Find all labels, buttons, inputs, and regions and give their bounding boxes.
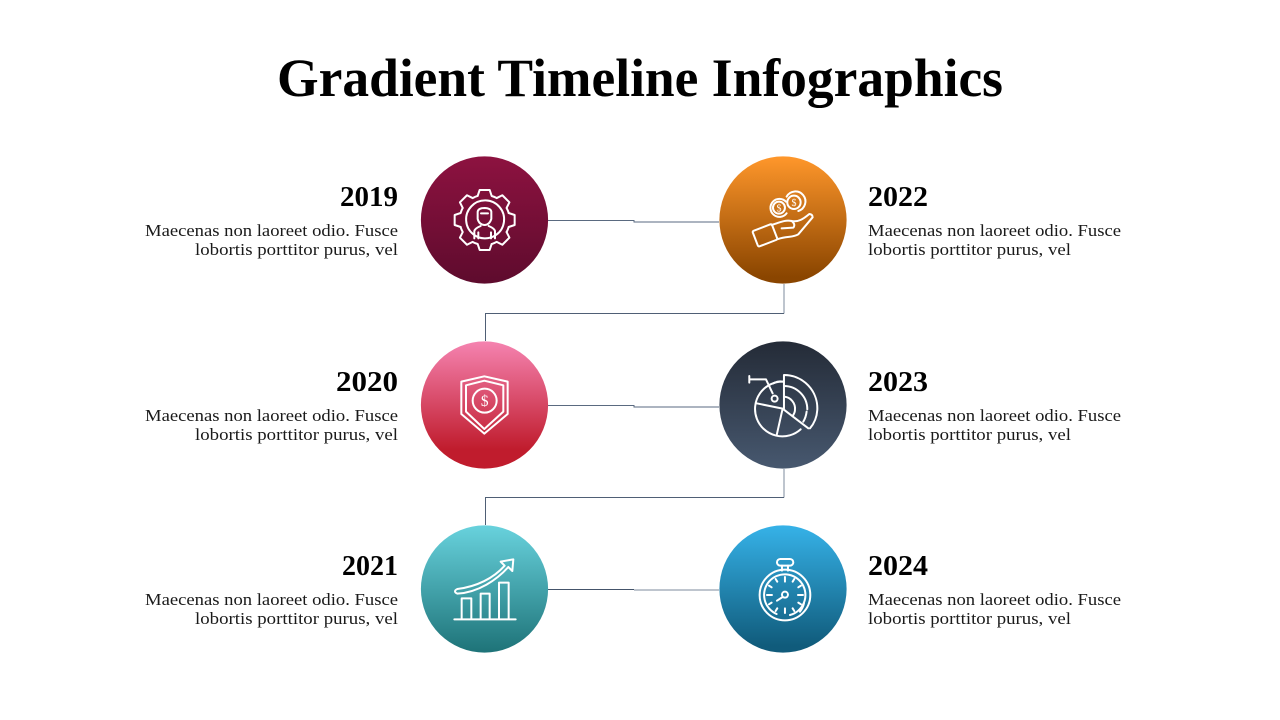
icon: hand with coins: $ [776,203,781,214]
circle 2023 [719,341,847,469]
icon: rising bar chart [454,559,516,619]
panel: 2019 [145,156,548,284]
panel: 2022 [719,156,1121,284]
description 2019: Maecenas non laoreet odio. Fusce [145,221,398,240]
year 2022: 2022 [868,181,928,213]
circle 2021 [421,525,548,653]
icon: shield with dollar: $ [481,393,489,410]
panel: 2024 [719,525,1121,653]
title: Gradient Timeline Infographics [277,48,1003,108]
icon: gear with person [455,190,515,250]
circle 2020 [421,341,548,469]
description 2021: lobortis porttitor purus, vel [195,609,398,628]
year 2020: 2020 [336,366,398,398]
icon: radar pie chart [749,375,817,436]
description 2024: lobortis porttitor purus, vel [868,609,1071,628]
description 2019 [145,221,398,259]
circle 2019 [421,156,548,284]
panel: 2023 [719,341,1121,469]
description 2022: lobortis porttitor purus, vel [868,240,1071,259]
year 2024: 2024 [868,550,928,582]
description 2024 [868,590,1121,628]
year 2021: 2021 [342,550,398,582]
description 2020 [145,406,398,444]
description 2023: Maecenas non laoreet odio. Fusce [868,406,1121,425]
circle 2024 [719,525,847,653]
description 2023: lobortis porttitor purus, vel [868,425,1071,444]
description 2022 [868,221,1121,259]
circle 2022 [719,156,847,284]
description 2021 [145,590,398,628]
panel: 2021 [145,525,548,653]
icon: stopwatch [760,559,810,620]
year 2019: 2019 [340,181,398,213]
description 2020: lobortis porttitor purus, vel [195,425,398,444]
panel: 2020 [145,341,548,469]
year 2023: 2023 [868,366,928,398]
connector lines [486,220,784,590]
description 2022: Maecenas non laoreet odio. Fusce [868,221,1121,240]
description 2023 [868,406,1121,444]
icon: shield with dollar [461,376,508,434]
description 2020: Maecenas non laoreet odio. Fusce [145,406,398,425]
description 2021: Maecenas non laoreet odio. Fusce [145,590,398,609]
description 2019: lobortis porttitor purus, vel [195,240,398,259]
icon: hand with coins: $ [791,198,796,209]
description 2024: Maecenas non laoreet odio. Fusce [868,590,1121,609]
icon: hand with coins [752,191,813,247]
